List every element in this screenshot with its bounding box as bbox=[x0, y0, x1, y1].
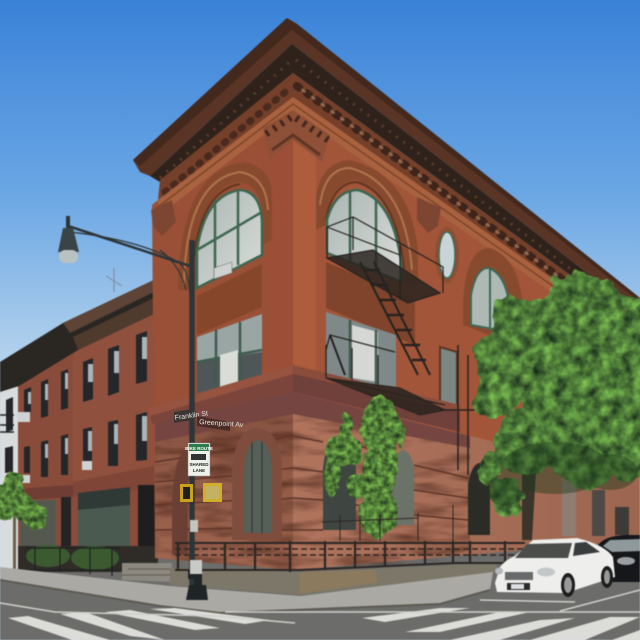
sidewalk bbox=[0, 567, 493, 613]
road lines bbox=[0, 590, 640, 623]
shared lane sign: SHARED bbox=[189, 462, 209, 467]
left second floor window bbox=[197, 314, 262, 395]
crosswalk stripes bbox=[8, 608, 640, 640]
steps bbox=[122, 563, 172, 582]
base shadow behind hedges bbox=[18, 546, 158, 572]
drain pipes bbox=[440, 345, 475, 475]
lamp head bbox=[58, 216, 79, 263]
lower far windows bbox=[562, 478, 629, 536]
street name signs bbox=[174, 409, 244, 431]
lower right arched windows bbox=[323, 438, 490, 535]
antenna bbox=[106, 268, 122, 292]
air conditioner bbox=[214, 262, 232, 279]
shared lane sign bbox=[185, 443, 213, 476]
side windows bbox=[573, 542, 600, 556]
lower left arched window bbox=[232, 428, 282, 540]
frieze bbox=[158, 73, 640, 340]
stone courses bbox=[155, 435, 468, 530]
architrave bbox=[158, 97, 640, 354]
stairs bbox=[360, 262, 418, 375]
small street tree bbox=[0, 473, 48, 578]
dentils bbox=[160, 60, 640, 322]
lamp pole bbox=[189, 240, 195, 595]
fire balcony on white house bbox=[0, 415, 14, 432]
right capital bbox=[417, 197, 441, 233]
right second floor window bbox=[326, 312, 396, 388]
left arch surround bbox=[178, 162, 272, 290]
iron fence bbox=[175, 505, 525, 572]
street name signs: Greenpoint Av bbox=[199, 419, 244, 429]
stone base wall bbox=[170, 563, 497, 595]
right arch surround bbox=[316, 160, 418, 285]
soffit bbox=[150, 44, 640, 326]
fire escape bbox=[326, 217, 475, 475]
left facade bbox=[152, 90, 293, 570]
street name signs: Franklin St bbox=[174, 410, 208, 422]
lower balcony bbox=[326, 335, 445, 405]
rowhouse brick wall bbox=[18, 305, 158, 560]
corner pier bbox=[272, 135, 293, 372]
far right arch bbox=[463, 248, 524, 345]
spandrel panels bbox=[197, 264, 262, 335]
belt course bbox=[150, 368, 293, 424]
lamp arm bbox=[68, 226, 190, 266]
left upper arched window bbox=[197, 190, 262, 288]
right facade bbox=[293, 90, 640, 570]
trunk bbox=[522, 470, 536, 540]
lower pole boxes bbox=[190, 520, 198, 532]
stone mottling bbox=[155, 414, 470, 570]
air conditioners bbox=[17, 412, 92, 483]
mauve band bbox=[293, 392, 470, 448]
foliage bbox=[473, 275, 640, 515]
row houses on the left bbox=[0, 278, 172, 582]
lower stone right bbox=[293, 392, 640, 570]
hedges bbox=[26, 545, 119, 570]
doorway arch bbox=[172, 450, 188, 555]
main building bbox=[133, 18, 640, 570]
corner capital bbox=[263, 110, 330, 162]
rowhouse upper windows bbox=[5, 331, 147, 477]
rowhouse cornice bbox=[0, 278, 158, 392]
storefront glass bbox=[78, 487, 130, 549]
fascia bbox=[133, 18, 640, 314]
right upper arched window bbox=[327, 190, 402, 282]
windshield bbox=[515, 543, 572, 558]
upper balcony bbox=[327, 250, 440, 303]
ivy bbox=[323, 397, 405, 540]
white car bbox=[495, 538, 615, 597]
storefront band bbox=[73, 465, 158, 497]
street lamp bbox=[58, 216, 208, 600]
road bbox=[0, 565, 640, 640]
large street tree bbox=[473, 275, 640, 540]
white building bbox=[0, 372, 19, 570]
shared lane sign: LANE bbox=[193, 468, 205, 473]
ground behind buildings bbox=[0, 540, 640, 640]
curb bbox=[0, 580, 490, 613]
pedestrian signals bbox=[180, 483, 222, 502]
porthole window bbox=[435, 227, 459, 283]
lower stone left bbox=[155, 392, 293, 570]
window highlights bbox=[28, 337, 147, 458]
iron fence bbox=[25, 548, 120, 576]
grille and headlights bbox=[505, 572, 533, 580]
wheels bbox=[561, 573, 575, 597]
foliage shadow bbox=[487, 442, 638, 506]
far window bbox=[440, 347, 457, 412]
dark door bbox=[138, 485, 155, 548]
shared lane sign: BIKE ROUTE bbox=[185, 446, 213, 451]
frieze rosettes bbox=[165, 86, 640, 336]
dark car bbox=[598, 535, 640, 582]
left capital bbox=[151, 200, 176, 236]
lamp base bbox=[186, 585, 208, 600]
